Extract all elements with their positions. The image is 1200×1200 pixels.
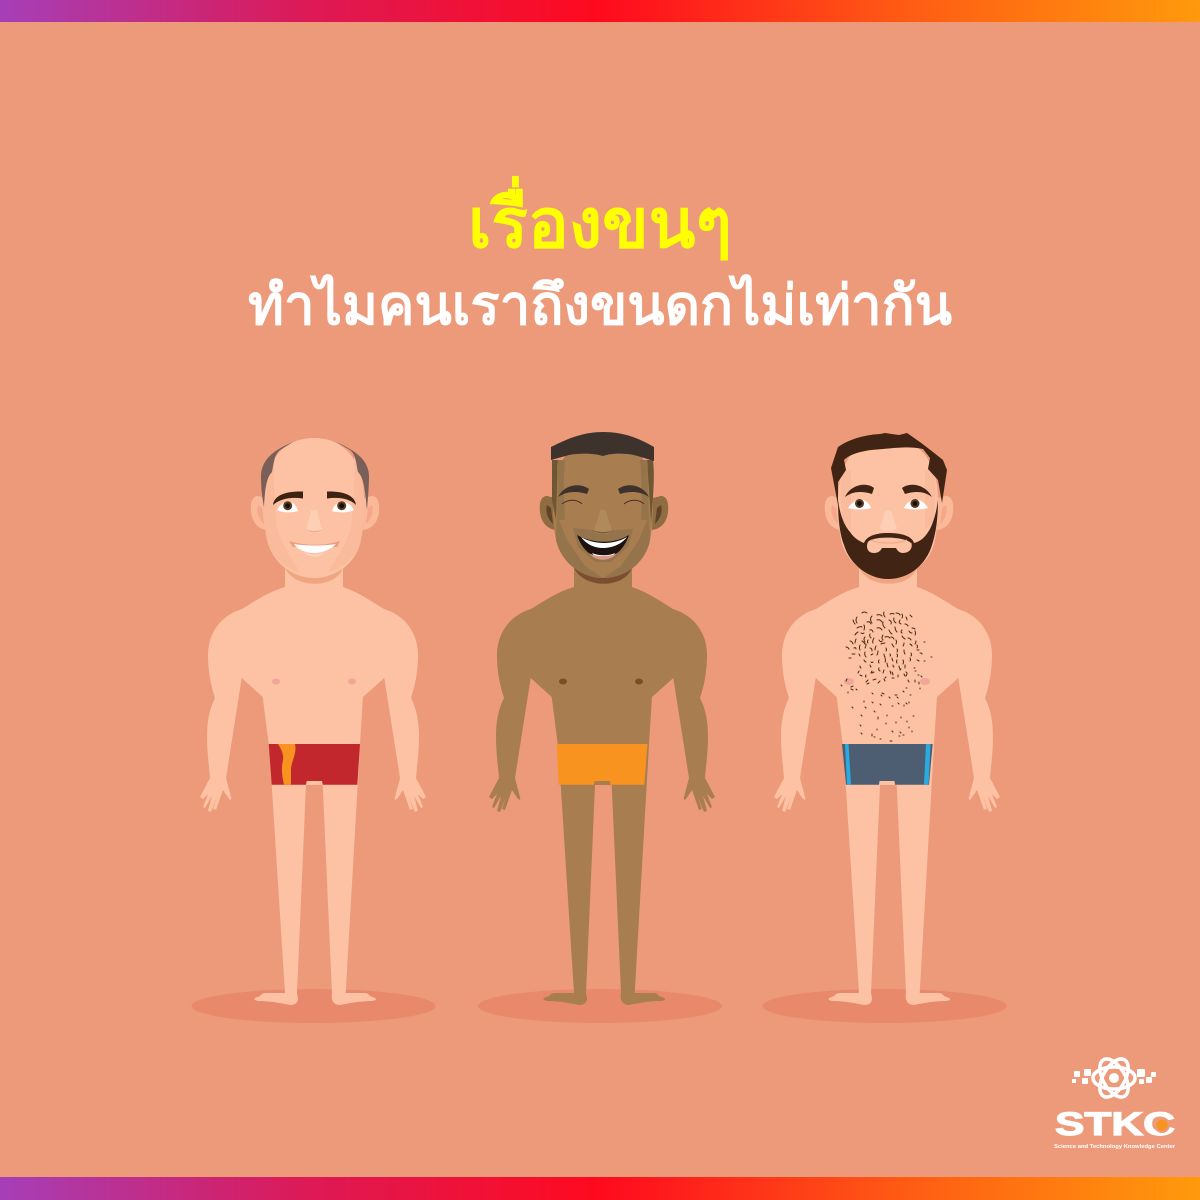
nipples <box>559 678 567 684</box>
orange dot <box>1154 1117 1170 1133</box>
head <box>553 438 653 578</box>
floor shadow <box>762 989 1006 1023</box>
head <box>264 438 364 578</box>
body <box>200 568 426 1005</box>
shorts stripe <box>278 744 295 785</box>
face shading <box>264 457 364 572</box>
stubble <box>556 515 650 578</box>
head <box>838 438 938 578</box>
closed eyes <box>562 500 644 504</box>
chest hair <box>841 612 932 741</box>
shorts <box>842 744 933 785</box>
side hair shading <box>552 460 654 522</box>
left stripe <box>845 744 851 785</box>
title: ทำไมคนเราถึงขนดกไม่เท่ากัน <box>248 273 952 336</box>
body <box>774 568 1000 1005</box>
floor shadow <box>192 989 436 1023</box>
ears <box>251 496 379 530</box>
laughing mouth <box>577 535 629 558</box>
right stripe <box>924 744 930 785</box>
nose <box>880 510 897 531</box>
wordmark: STKC <box>1055 1106 1175 1142</box>
figure: bald man in red shorts <box>192 438 436 1023</box>
side hair <box>261 442 369 510</box>
bottom gradient bar <box>0 1177 1200 1200</box>
title: เรื่องขนๆ <box>468 175 732 262</box>
eyebrows <box>273 491 356 505</box>
nipples <box>844 678 854 685</box>
nose <box>594 510 612 534</box>
atom icon <box>1093 1054 1135 1102</box>
figure: dark-skinned man in orange shorts <box>478 432 722 1023</box>
eyebrows <box>845 485 932 497</box>
nipples <box>272 678 280 684</box>
floor shadow <box>478 989 722 1023</box>
eyebrows <box>558 485 649 497</box>
flat-top hair <box>551 432 654 461</box>
neck shadow <box>574 560 632 584</box>
logo: STKC <box>1054 1054 1176 1150</box>
eyes <box>277 502 354 512</box>
shorts <box>557 744 648 785</box>
cheek shading <box>557 460 649 520</box>
face shading <box>840 470 936 530</box>
hair <box>831 433 947 505</box>
side dots <box>1072 1069 1156 1084</box>
mouth <box>289 541 340 547</box>
shorts <box>269 744 360 785</box>
chin cutout <box>867 537 912 553</box>
beard <box>838 500 938 579</box>
top gradient bar <box>0 0 1200 22</box>
body <box>489 568 715 1005</box>
ears <box>540 496 668 530</box>
figure: bearded hairy man in blue shorts <box>762 433 1006 1023</box>
lip <box>871 540 907 543</box>
ears <box>825 496 953 530</box>
neck shadow <box>859 560 917 584</box>
tagline: Science and Technology Knowledge Center <box>1054 1144 1176 1150</box>
eyes <box>848 500 928 510</box>
neck shadow <box>285 560 343 584</box>
title <box>248 175 952 336</box>
nose <box>306 510 323 533</box>
